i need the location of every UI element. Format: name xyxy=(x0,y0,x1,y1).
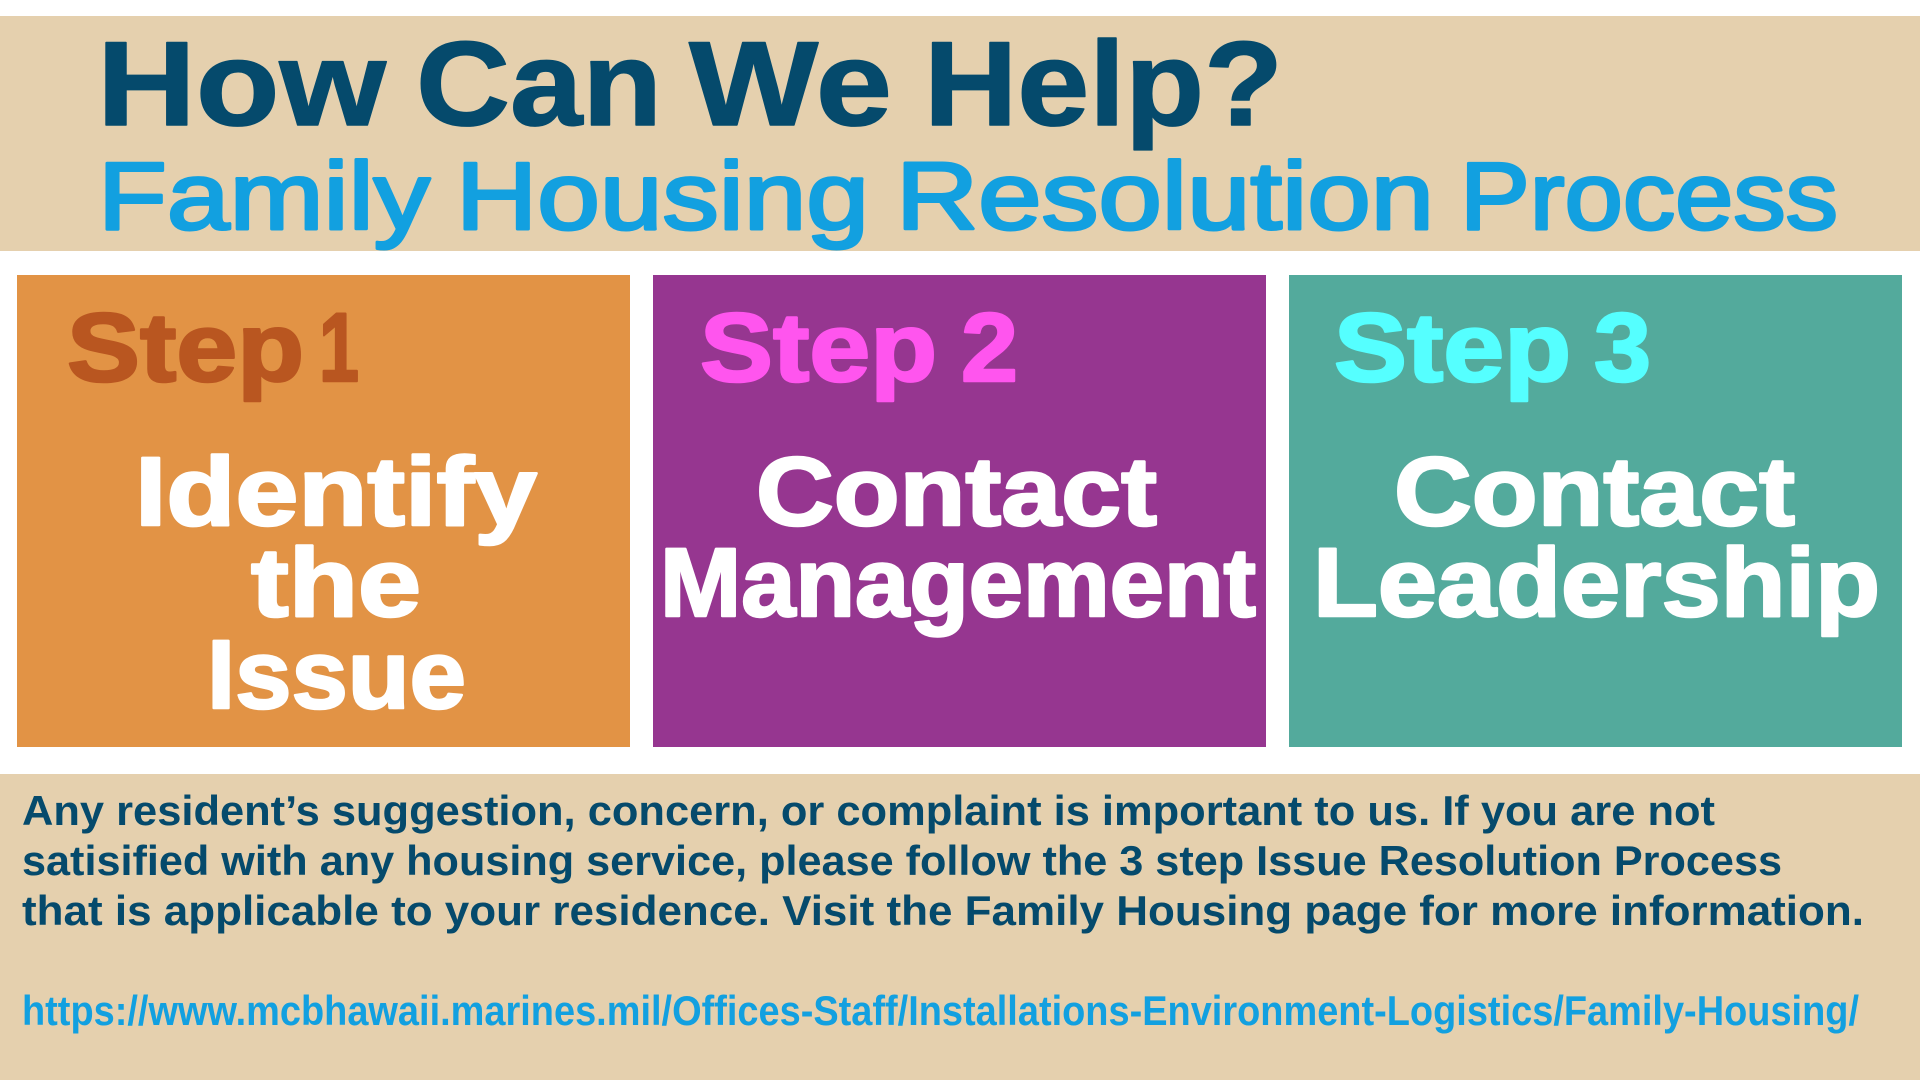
body text: Any resident’s suggestion, concern, or complaint is important to us. If you are not xyxy=(22,787,1715,834)
panel: step 3 xyxy=(1289,275,1902,747)
step 2 title: Contact xyxy=(756,437,1157,546)
step 3 title xyxy=(1313,437,1880,637)
body text: that is applicable to your residence. Visit the Family Housing page for more information. xyxy=(22,887,1864,934)
title: Help? xyxy=(924,17,1283,151)
body text: satisified with any housing service, please follow the 3 step Issue Resolution Process xyxy=(22,837,1782,884)
panel: header xyxy=(0,16,1920,251)
step 1 label: Step xyxy=(67,293,304,402)
subtitle: Resolution xyxy=(896,143,1434,250)
step 3 title: Leadership xyxy=(1313,528,1880,637)
title: Can xyxy=(416,17,662,151)
step 3 title: Contact xyxy=(1394,437,1795,546)
subtitle: Family xyxy=(98,143,430,250)
subtitle xyxy=(98,143,1838,250)
step 1 title: Identify xyxy=(135,437,537,546)
step 2 label: Step xyxy=(700,293,937,402)
panel: step 2 xyxy=(653,275,1266,747)
step 2 label: 2 xyxy=(961,293,1018,402)
subtitle: Housing xyxy=(456,143,869,250)
step 1 title: Issue xyxy=(207,620,466,729)
title: How xyxy=(97,17,387,151)
step 2 label xyxy=(700,293,1018,402)
step 1 title xyxy=(135,437,537,729)
panel: step 1 xyxy=(17,275,630,747)
step 2 title xyxy=(660,437,1256,637)
step 1 label: 1 xyxy=(319,293,359,402)
subtitle: Process xyxy=(1460,143,1838,250)
panel: footer xyxy=(0,774,1920,1080)
step 3 label: 3 xyxy=(1594,293,1651,402)
title xyxy=(97,17,1283,151)
step 3 label xyxy=(1334,293,1651,402)
step 2 title: Management xyxy=(660,528,1256,637)
step 3 label: Step xyxy=(1334,293,1571,402)
body text xyxy=(22,787,1864,934)
step 1 title: the xyxy=(251,528,421,637)
title: We xyxy=(689,17,892,151)
